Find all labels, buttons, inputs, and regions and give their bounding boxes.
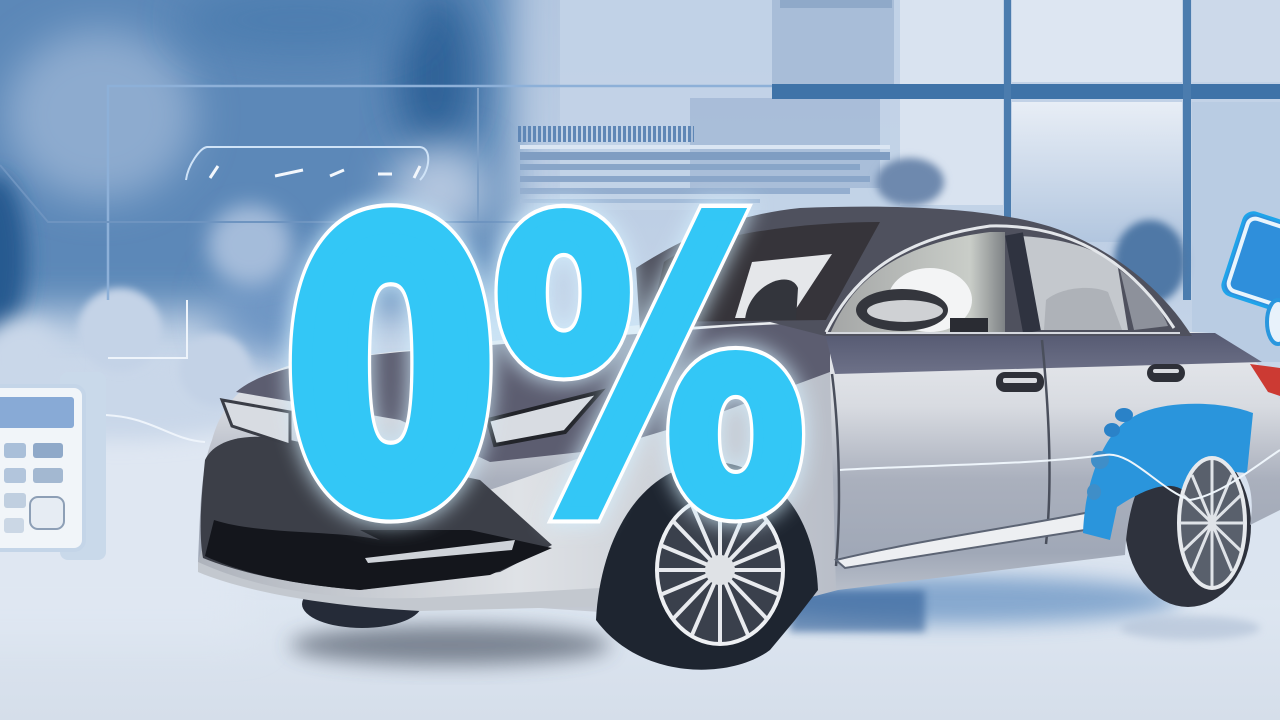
far front wheel: [302, 580, 422, 628]
percent sign outline and fill: %: [492, 142, 807, 602]
front fender and bumper panel: [198, 372, 836, 606]
data panel: [518, 134, 890, 203]
big 0% figure: [288, 142, 807, 602]
front wheel: [596, 462, 818, 670]
rear side window: [1020, 236, 1128, 330]
windshield: [650, 222, 880, 322]
front side window: [830, 232, 1005, 334]
sill highlight: [836, 512, 1090, 568]
building windows: [560, 0, 1280, 362]
holographic interface lines: [0, 86, 772, 442]
icon: calculator: [0, 372, 106, 560]
tail light: [1250, 364, 1280, 396]
car: [198, 207, 1280, 670]
side graphic: [1083, 404, 1253, 540]
front lower bumper: [201, 437, 552, 590]
glow: [288, 142, 807, 602]
rear wheel rim: [1179, 458, 1245, 588]
percent sign outline and fill: %: [492, 142, 807, 602]
body swoosh line: [840, 450, 1280, 500]
side dark belt: [825, 333, 1262, 374]
glow: 0: [288, 150, 493, 590]
car body: [198, 318, 1280, 612]
window frame: [826, 226, 1174, 332]
roof and greenhouse: [636, 207, 1192, 336]
glow: %: [492, 142, 807, 602]
zero outline and fill: 0: [288, 150, 493, 590]
icon: blue badge: [1220, 210, 1280, 344]
floor shadow: [290, 576, 1260, 665]
headlight: [222, 400, 290, 445]
rear wheel: [1125, 443, 1251, 607]
door lines and handles: [832, 340, 1049, 566]
dark hood: [236, 322, 830, 462]
zero outline and fill: 0: [288, 150, 493, 590]
